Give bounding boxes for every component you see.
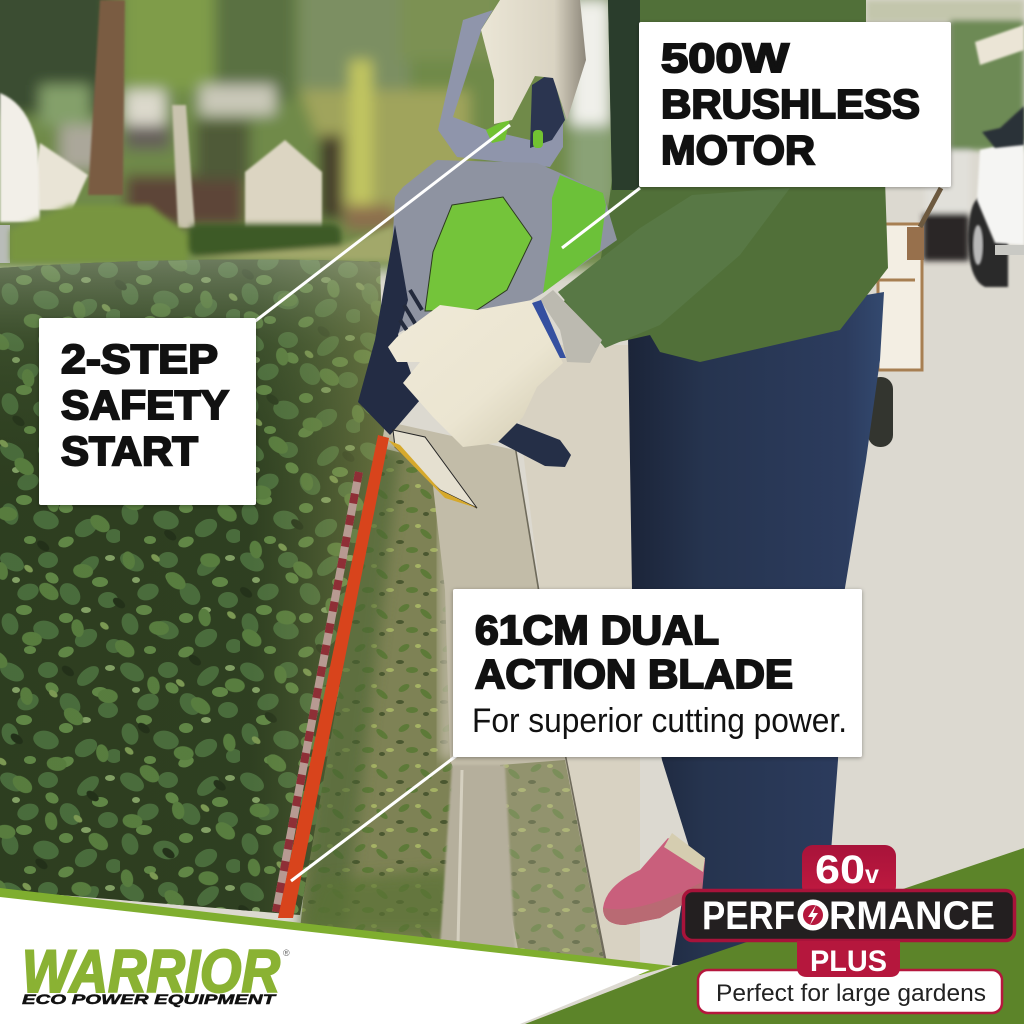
watch	[532, 290, 602, 363]
blade bar	[278, 435, 389, 918]
trigger	[486, 118, 510, 143]
shirt	[560, 0, 888, 362]
callout: 61cm dual action blade: For superior cutting power.	[472, 702, 847, 740]
60v tab	[802, 845, 896, 897]
car window	[982, 106, 1024, 148]
plus tab and subtitle: Perfect for large gardens	[716, 980, 986, 1007]
white dome	[0, 93, 40, 222]
callout leader lines	[254, 125, 640, 881]
callout: 500W brushless motor: MOTOR	[661, 127, 815, 173]
car	[977, 140, 1024, 245]
callout: 61cm dual action blade: 61CM DUAL	[475, 607, 719, 653]
pale trunk	[172, 105, 195, 228]
callout: 2-step safety start: SAFETY	[61, 382, 229, 428]
rear handle loop	[438, 10, 563, 167]
leader: safety start	[254, 125, 510, 322]
plus tab and subtitle	[698, 941, 1002, 1013]
performance bar: PERF	[702, 894, 795, 938]
plus tab and subtitle: PLUS	[810, 945, 887, 978]
right distance	[866, 0, 1024, 261]
vents	[400, 290, 422, 335]
boot	[603, 838, 705, 925]
cart	[868, 188, 941, 447]
callout: 61cm dual action blade: ACTION BLADE	[475, 651, 793, 697]
front grip	[495, 418, 571, 467]
brand logo: ECO POWER EQUIPMENT	[22, 991, 277, 1007]
callout: 2-step safety start: 2-STEP	[61, 336, 218, 382]
small shed	[35, 143, 88, 210]
performance bar: RMANCE	[829, 894, 995, 938]
hedge trimmer	[276, 10, 617, 918]
hedge	[0, 260, 384, 915]
green side panel	[543, 175, 606, 293]
person	[558, 0, 888, 965]
brand logo: ®	[283, 948, 290, 958]
brand logo: WARRIOR	[22, 938, 280, 1005]
garden backdrop	[0, 0, 640, 270]
garden shed	[245, 140, 322, 228]
60v tab: 60	[815, 848, 865, 892]
upper glove	[481, 0, 586, 124]
callout: 2-step safety start	[39, 318, 256, 505]
car wheel	[968, 197, 1008, 287]
car sill	[995, 245, 1024, 255]
shears	[393, 430, 477, 508]
bottom band: lime stripe	[0, 888, 672, 975]
leader: blade	[291, 756, 456, 881]
bottom band: white panel	[0, 897, 650, 1024]
blade teeth	[276, 472, 359, 912]
callout: 500W brushless motor	[639, 22, 951, 187]
leader: motor	[562, 188, 640, 248]
green hex panel	[425, 197, 532, 311]
tree trunk	[88, 0, 125, 195]
trousers	[628, 292, 884, 965]
performance bar	[684, 890, 1014, 940]
canopy	[975, 25, 1024, 65]
60v tab: v	[865, 861, 879, 889]
rear dark panel	[358, 225, 420, 435]
sidewalk and kerb	[510, 345, 640, 965]
callout: 61cm dual action blade	[453, 589, 862, 757]
callout: 500W brushless motor: BRUSHLESS	[661, 81, 920, 127]
lower glove	[388, 300, 563, 447]
callout: 2-step safety start: START	[61, 428, 198, 474]
motor housing	[375, 160, 617, 375]
bottom band: green corner	[525, 848, 1024, 1024]
verge with clippings	[300, 420, 605, 965]
shrubs	[10, 205, 395, 262]
performance badge	[684, 845, 1014, 1013]
callout: 500W brushless motor: 500W	[661, 35, 789, 81]
